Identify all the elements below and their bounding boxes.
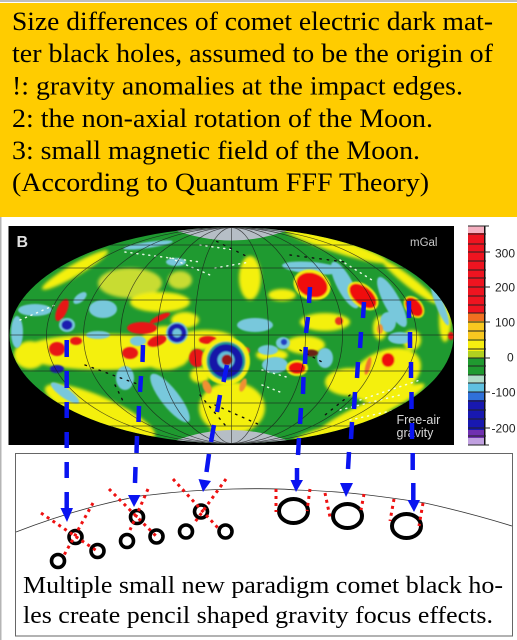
unit label mGal: mGal (410, 237, 437, 249)
small black hole rings (52, 505, 232, 568)
header banner: 3: small magnetic field of the Moon. (12, 135, 420, 165)
large black hole rings (279, 499, 421, 538)
colour scale legend (468, 226, 516, 445)
free-air gravity label: Free-air (396, 413, 440, 427)
arrow 4 (290, 287, 310, 492)
colour scale legend: -200 (492, 422, 516, 436)
lower panel: comet black holes: les create pencil shaped gravity focus effects. (23, 603, 493, 629)
header banner (0, 3, 517, 217)
graticule (10, 226, 454, 445)
colour scale legend: 200 (495, 280, 515, 294)
header banner: (According to Quantum FFF Theory) (12, 167, 429, 197)
arrow 6 (408, 301, 420, 512)
arrow 5 (340, 302, 364, 497)
yellow terrain (14, 221, 451, 450)
colour scale legend: 0 (507, 350, 514, 364)
colour scale legend: -100 (492, 386, 516, 400)
colour scale legend: 100 (495, 316, 515, 330)
surface speckle (20, 245, 420, 420)
header banner: !: gravity anomalies at the impact edges. (12, 70, 463, 100)
header banner: 2: the non-axial rotation of the Moon. (12, 103, 433, 133)
red dotted gravity focus lines (41, 479, 423, 557)
arrow 1 (60, 340, 73, 522)
polar caps (176, 228, 286, 240)
map label B: B (16, 234, 28, 251)
arrow 2 (128, 345, 143, 507)
light blue zones (11, 239, 452, 427)
header banner: Size differences of comet electric dark mat- (12, 6, 493, 36)
lower panel: comet black holes (16, 454, 512, 636)
Orientale bullseye (202, 337, 250, 385)
colour scale legend: 300 (495, 246, 515, 260)
header banner: ter black holes, assumed to be the origin of (12, 38, 493, 68)
mascon basins (292, 268, 332, 302)
gravity map of the Moon: gravity (396, 426, 434, 440)
caption: Multiple small new paradigm comet black ho- (23, 573, 503, 599)
gravity map of the Moon (8, 221, 456, 450)
red and blue anomalies (49, 264, 454, 395)
lunar surface curve (16, 489, 512, 532)
arrow 3 (198, 365, 227, 492)
blue dashed arrows linking map to black holes (60, 287, 420, 522)
